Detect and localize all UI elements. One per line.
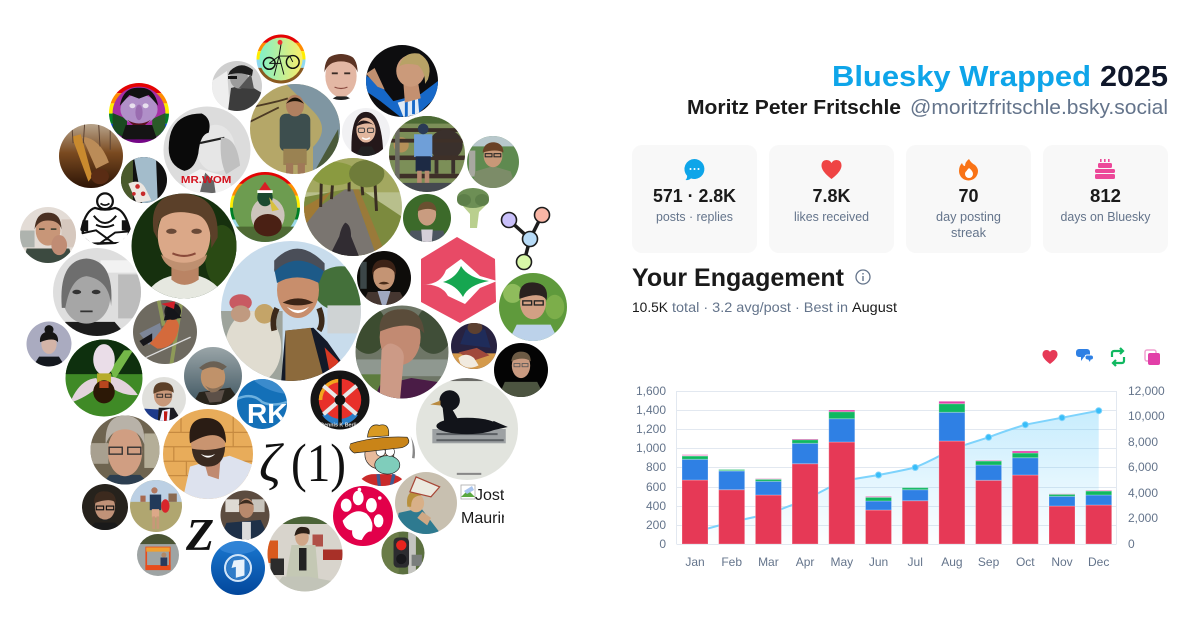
month labels: Aug [941,555,963,569]
avatar: red paw logo [333,486,393,546]
month labels: Mar [758,555,779,569]
avatar: cyclist with blue helmet [221,241,369,384]
avatar: man with moustache [357,251,411,305]
avatar: person on beach [130,480,182,532]
right axis labels: 4,000 [1128,486,1158,500]
avatar: man covering eyes [350,306,452,398]
avatar: mallard duck with santa hat [230,172,300,242]
left axis labels: 1,600 [636,384,666,398]
avatar: grey-haired man with glasses [90,416,160,484]
avatar: man in green shirt [467,136,519,188]
avatar: book in autumn field [59,124,123,188]
cumulative area [695,411,1099,544]
right axis labels: 12,000 [1128,384,1165,398]
left axis labels: 200 [646,518,666,532]
month labels: Dec [1088,555,1109,569]
label: day posting [936,210,1001,224]
subtitle: name and handle: @moritzfritschle.bsky.social [910,97,1168,119]
month labels: Jul [908,555,923,569]
bars: Aug [939,401,965,544]
engagement summary: 10.5K [632,299,669,315]
left axis labels: 400 [646,499,666,513]
avatar: man head cutout [324,54,358,100]
avatar: man in floral shirt [403,194,451,242]
avatar: RKI logo: RKI [247,398,295,429]
avatar: bearded man by brick wall [163,409,253,499]
icon: replies bubbles [1076,349,1094,363]
right axis labels: 0 [1128,537,1135,551]
avatar: man with dark glasses frame [82,484,128,530]
math glyph: zeta of one: ζ [259,433,284,493]
avatar: woman with dark updo [26,322,72,366]
avatar: broccoli [457,188,489,228]
icon: chat bubble [684,159,704,180]
panel: posts and replies [632,145,757,253]
left axis labels: 1,400 [636,403,666,417]
chart legend [1042,348,1160,366]
avatar: man in flat cap outdoors [184,347,242,405]
avatar cluster [20,34,567,595]
avatar: man with red tie [142,377,186,421]
subtitle: name and handle [687,97,1168,119]
avatar: man in dark jacket [220,490,270,540]
broken image: Jost Maurin [461,485,510,527]
icon: likes heart [1042,350,1058,364]
bars: May [829,410,855,544]
left axis labels: 0 [659,537,666,551]
title: Bluesky Wrapped 2025: Bluesky Wrapped [832,61,1091,93]
avatar: man on black background [494,343,548,397]
avatar: medieval manuscript figure [395,472,457,534]
value: 70 [958,186,978,206]
broken image: Jost Maurin: Maurin [461,510,510,527]
avatar: tree-lined road with shadow [304,158,402,256]
right axis labels: 2,000 [1128,511,1158,525]
subtitle: name and handle: Moritz Peter Fritschle [687,97,901,119]
logo: Z letter: Z [185,509,214,560]
label: likes received [794,210,869,224]
icon: quotes [1145,350,1160,365]
bars: Jun [866,496,892,544]
avatar: man in flat cap [212,61,262,111]
cumulative line [695,411,1099,532]
icon: flame [959,159,978,180]
avatar: laughing buddha [80,192,131,245]
avatar: greyscale woman [53,248,141,336]
left axis labels: 800 [646,460,666,474]
icon: reposts [1112,348,1124,366]
icon: info [856,270,870,284]
math glyph: zeta of one: (1) [291,433,346,493]
bars: Oct [1012,451,1038,544]
avatar: RKI logo [237,379,287,429]
month labels [685,555,1109,569]
bars: Sep [976,460,1002,544]
bars: Apr [792,439,818,544]
avatar: red traffic light [382,532,424,574]
avatar: smiling man main [132,194,239,298]
value: 7.8K [812,186,850,206]
month labels: Apr [796,555,814,569]
month labels: Sep [978,555,1000,569]
math glyph: zeta of one [259,433,346,493]
month labels: Feb [721,555,742,569]
avatar: Mr. WOM [164,106,250,194]
avatar: farmer with face mask [349,420,415,486]
engagement summary [632,299,897,315]
panel: day posting streak [906,145,1031,253]
right axis labels [1128,384,1165,551]
broken image: Jost Maurin: Jost [475,487,505,504]
title: Bluesky Wrapped 2025: 2025 [1100,61,1168,93]
bars: Jan [682,454,708,544]
value: 812 [1090,186,1121,206]
left axis labels: 600 [646,480,666,494]
avatar: man watching bison [389,116,465,192]
month labels: Nov [1051,555,1073,569]
heading: Your Engagement: Your Engagement [632,264,845,292]
avatar: man at lake shore [250,84,340,176]
avatar: man with glasses in foliage [499,273,567,341]
icon: birthday cake [1095,159,1115,179]
avatar: bullfinch on branch [133,300,197,364]
left axis labels: 1,200 [636,422,666,436]
avatar: bee orchid [66,340,142,416]
value: 571 · 2.8K [653,186,736,206]
bars: Feb [719,469,745,544]
avatar: Dennis K Berlin emblem [310,370,370,430]
avatar: orange cage on water [137,534,179,576]
bars: Jul [902,488,928,544]
label line 2: streak [951,226,987,240]
icon: heart [821,160,842,179]
combo chart: monthly engagement [636,384,1165,569]
avatar: rainbow bicycle [256,34,306,84]
engagement summary: total · 3.2 avg/post · Best in [672,299,848,315]
avatar: man resting chin on hand [20,207,76,263]
avatar: Mr. WOM: MR.WOM [181,175,231,186]
gridlines [676,391,1116,544]
panel: likes received [769,145,894,253]
avatar: duck illustration [416,378,518,480]
avatar: Dennis K Berlin emblem: Dennis K Berlin [320,423,360,429]
bars: Mar [755,478,781,544]
bars: Nov [1049,494,1075,544]
panel: days on Bluesky [1043,145,1168,253]
engagement summary: August [852,299,897,315]
label: posts · replies [656,210,733,224]
avatar: person at desk [451,321,497,369]
month labels: Jun [869,555,888,569]
avatar: the Count [109,83,169,143]
logo: red hexagon with green diamond [421,237,497,323]
left axis labels: 1,000 [636,441,666,455]
month labels: Jan [685,555,705,569]
month labels: Oct [1016,555,1035,569]
avatar: footballer in blue and white [366,45,438,117]
right axis labels: 10,000 [1128,409,1165,423]
right axis labels: 8,000 [1128,435,1158,449]
cumulative points [876,408,1102,478]
month labels: May [830,555,853,569]
label: days on Bluesky [1060,210,1151,224]
avatar: jeans and gift [121,157,167,203]
avatar: woman sitting in studio [268,516,342,592]
bars: Dec [1086,490,1112,544]
avatar: woman with glasses [342,108,390,156]
right axis labels: 6,000 [1128,460,1158,474]
left axis labels [636,384,666,551]
avatar: Tagesschau globe [211,541,265,595]
icon: graph nodes [502,208,550,270]
